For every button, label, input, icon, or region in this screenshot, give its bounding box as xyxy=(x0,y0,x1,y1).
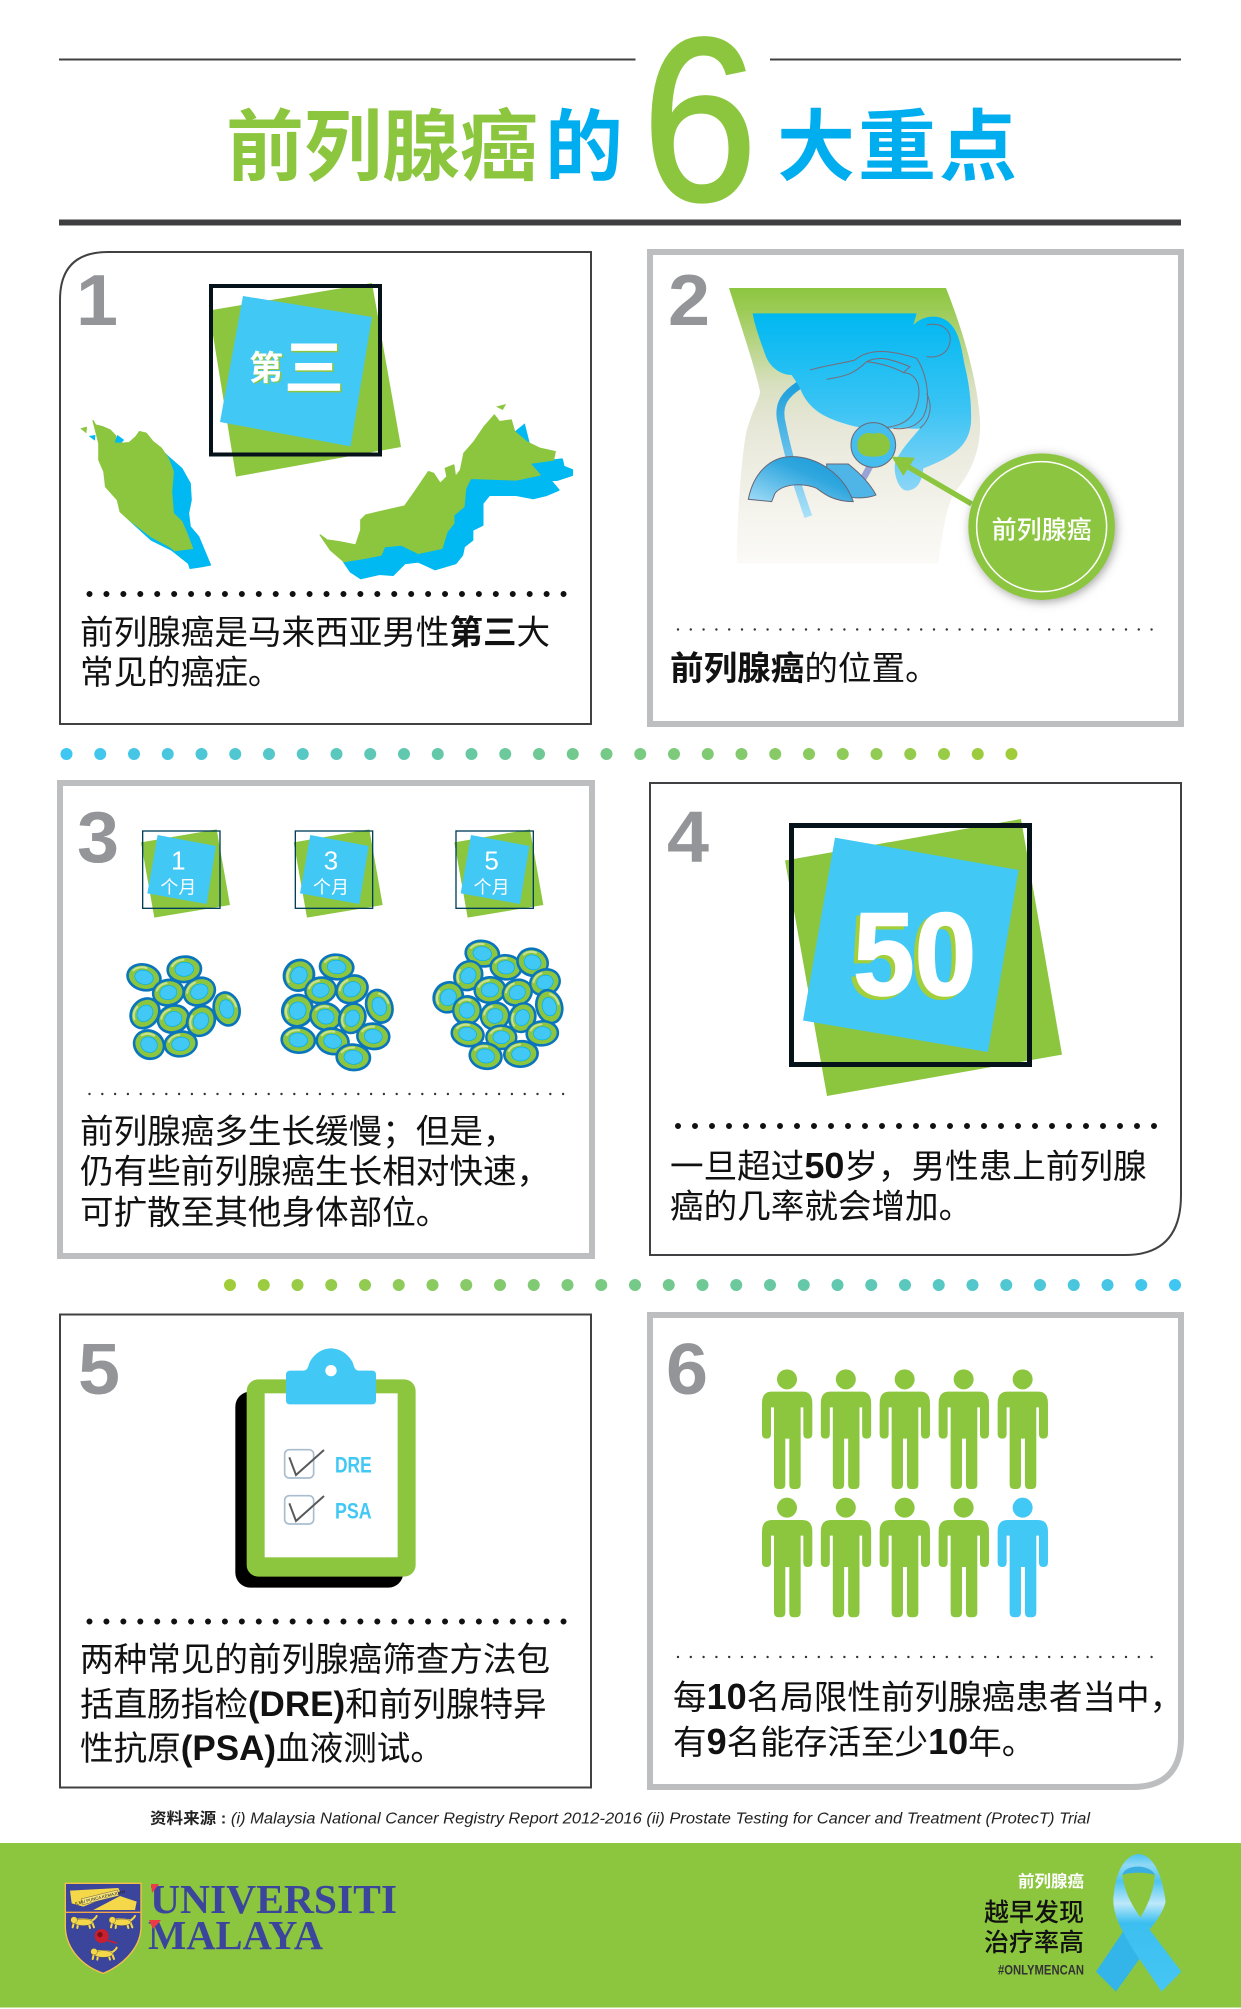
sticker: 第三: 第 xyxy=(249,350,283,388)
sticker: 3 months: 个月 xyxy=(313,877,349,897)
text block: 常见的癌症。 xyxy=(80,654,281,692)
panel 5: screening methods xyxy=(60,1314,591,1788)
sticker: 50: 50 xyxy=(849,892,972,1024)
icon: clipboard: PSA xyxy=(335,1499,372,1524)
sticker: 50: 50 xyxy=(853,889,976,1021)
text block: 仍有些前列腺癌生长相对快速， xyxy=(80,1153,550,1191)
panel 3: growth over months: 3 xyxy=(77,797,119,878)
source note: 资料来源 : (i) Malaysia National Cancer Registry Report 2012-2016 (ii) Prostate Testing for Cancer and Treatment (ProtecT) Trial xyxy=(150,1810,1091,1828)
logo: wordmark: UNIVERSITI xyxy=(150,1876,397,1922)
footer band xyxy=(0,1843,1241,2008)
sticker: 5 months: 5 xyxy=(484,845,499,875)
title: 大重点 xyxy=(777,103,1017,191)
panel 4: age 50: 4 xyxy=(667,796,709,877)
sticker: 50 xyxy=(785,819,1062,1096)
slogan: 越早发现 xyxy=(984,1899,1084,1927)
icon: clipboard: DRE xyxy=(335,1453,372,1478)
text block: 每10名局限性前列腺癌患者当中， xyxy=(673,1676,1183,1717)
sticker: 第三: 第 xyxy=(250,351,284,389)
slogan: #ONLYMENCAN xyxy=(998,1962,1084,1978)
text block: 可扩散至其他身体部位。 xyxy=(80,1194,449,1232)
logo: university crest: ILMU PUNCA KEMAJUAN xyxy=(75,1889,125,1906)
logo: university crest xyxy=(65,1883,141,1973)
text block: 前列腺癌多生长缓慢；但是， xyxy=(80,1113,517,1151)
panel 2: prostate location: 2 xyxy=(668,260,710,341)
sticker: 1 month: 1 xyxy=(171,845,186,875)
panel 3: growth over months xyxy=(60,783,592,1256)
sticker: 第三: 三 xyxy=(285,336,345,403)
sticker: 5 months xyxy=(454,829,543,918)
people chart: 9 of 10 xyxy=(762,1369,1048,1617)
text block: 前列腺癌是马来西亚男性第三大 xyxy=(80,615,550,652)
map of Malaysia xyxy=(80,404,572,578)
callout circle: 前列腺癌 xyxy=(992,516,1092,544)
sticker: 3 months: 3 xyxy=(324,845,338,875)
panel 5: screening methods: 5 xyxy=(78,1329,120,1410)
slogan xyxy=(984,1871,1084,1978)
text block: 有9名能存活至少10年。 xyxy=(673,1721,1035,1762)
dotted gradient divider xyxy=(230,1279,1176,1291)
dotted gradient divider xyxy=(66,748,1012,760)
slogan: 治疗率高 xyxy=(984,1929,1084,1957)
sticker: 1 month xyxy=(141,829,230,918)
title: 的 xyxy=(545,103,623,191)
panel 2: prostate location xyxy=(650,252,1181,724)
sticker: 5 months: 个月 xyxy=(474,877,510,897)
logo: wordmark xyxy=(148,1876,397,1958)
panel 6: survival xyxy=(650,1315,1183,1787)
sticker: 3 months xyxy=(294,829,383,918)
logo: wordmark: MALAYA xyxy=(148,1912,323,1958)
sticker: 1 month: 个月 xyxy=(160,877,196,897)
panel 4: age 50 xyxy=(650,783,1181,1255)
sticker: 第三: 三 xyxy=(284,335,344,402)
text block: 性抗原(PSA)血液测试。 xyxy=(80,1729,444,1768)
panel 1: third most common xyxy=(60,252,591,724)
icon: clipboard xyxy=(235,1348,416,1588)
icon: awareness ribbon xyxy=(1096,1854,1181,1992)
panel 1: third most common: 1 xyxy=(76,260,118,341)
text block: 两种常见的前列腺癌筛查方法包 xyxy=(80,1641,550,1679)
slogan: 前列腺癌 xyxy=(1018,1871,1084,1891)
sticker: 第三 xyxy=(209,283,401,477)
anatomy diagram xyxy=(729,288,1115,600)
panel 6: survival: 6 xyxy=(666,1329,708,1410)
title xyxy=(59,0,1181,250)
cell clusters xyxy=(125,939,566,1071)
text block: 括直肠指检(DRE)和前列腺特异 xyxy=(80,1685,547,1724)
text block: 癌的几率就会增加。 xyxy=(670,1188,972,1226)
arrow to prostate xyxy=(892,457,972,504)
text block: 前列腺癌的位置。 xyxy=(670,650,939,688)
text block: 一旦超过50岁，男性患上前列腺 xyxy=(670,1145,1147,1186)
callout circle xyxy=(968,453,1115,600)
title: 前列腺癌 xyxy=(226,103,538,191)
